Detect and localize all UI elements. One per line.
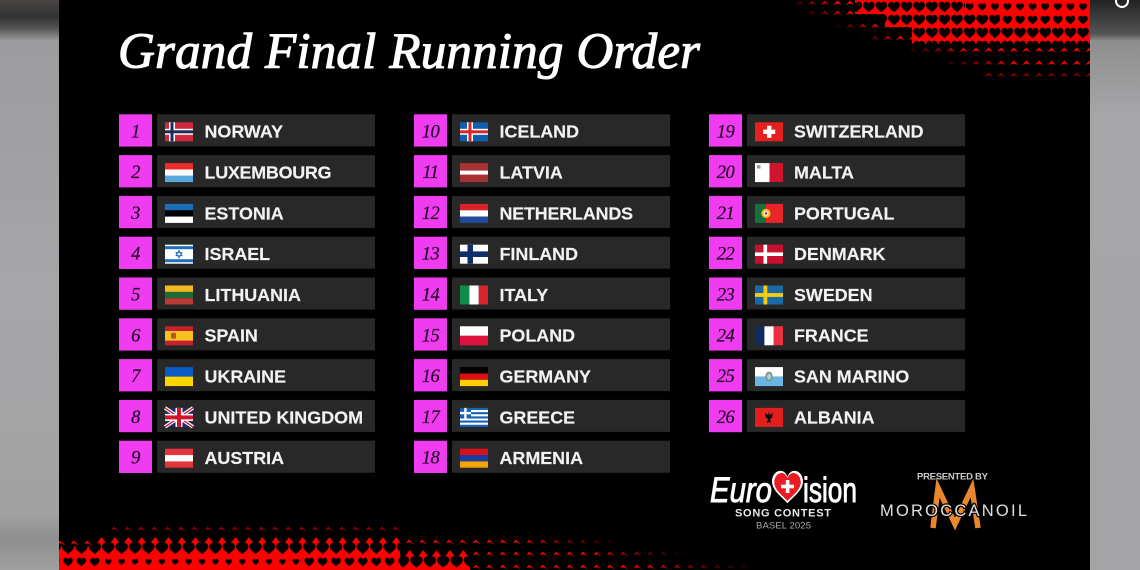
logo: Eurovision Song Contest Basel 2025: SONG CONTEST <box>735 508 831 520</box>
row: 9 Austria <box>119 441 375 473</box>
row: 18 Armenia: ARMENIA <box>500 448 583 468</box>
row: 26 Albania: 26 <box>717 408 736 428</box>
row: 25 San Marino <box>709 359 965 391</box>
icon: flag of Switzerland <box>755 122 783 141</box>
row: 16 Germany: GERMANY <box>500 367 591 387</box>
title: Grand Final Running Order <box>118 24 700 80</box>
row: 12 Netherlands: NETHERLANDS <box>500 203 633 223</box>
logo: presented by Moroccanoil: MOROCCANOIL <box>880 502 1027 520</box>
icon: flag of San Marino <box>755 367 783 386</box>
row: 17 Greece: GREECE <box>500 407 575 427</box>
row: 21 Portugal: PORTUGAL <box>794 203 894 223</box>
row: 9 Austria: 9 <box>131 449 140 469</box>
row: 13 Finland: FINLAND <box>500 244 578 264</box>
column: positions 10 to 18 <box>414 114 670 473</box>
row: 24 France: 24 <box>717 326 734 346</box>
icon: flag of Albania <box>755 408 783 427</box>
row: 17 Greece <box>414 400 670 432</box>
logo: Eurovision Song Contest Basel 2025: Euro <box>710 471 772 510</box>
row: 12 Netherlands <box>414 196 670 228</box>
row: 1 Norway <box>119 114 375 147</box>
row: 14 Italy <box>414 278 670 310</box>
row: 8 United Kingdom <box>119 400 375 432</box>
icon: flag of Latvia <box>460 163 488 182</box>
row: 3 Estonia <box>119 196 375 228</box>
icon: flag of Armenia <box>460 449 488 468</box>
pattern: red hearts bottom left <box>59 526 762 570</box>
icon: flag of Sweden <box>755 286 783 304</box>
icon: top-right player button <box>1116 0 1128 7</box>
row: 15 Poland: POLAND <box>500 326 575 346</box>
row: 5 Lithuania: 5 <box>131 286 140 306</box>
row: 5 Lithuania <box>119 278 375 310</box>
row: 25 San Marino: SAN MARINO <box>794 367 909 387</box>
row: 26 Albania <box>709 400 965 432</box>
logo: presented by Moroccanoil <box>880 472 1027 528</box>
row: 1 Norway: NORWAY <box>204 122 283 142</box>
row: 23 Sweden <box>709 278 965 310</box>
logo: Eurovision Song Contest Basel 2025: ision <box>803 471 857 510</box>
logo: Eurovision Song Contest Basel 2025 <box>710 471 857 532</box>
row: 1 Norway: 1 <box>131 122 140 142</box>
row: 2 Luxembourg: 2 <box>131 163 140 183</box>
icon: flag of Denmark <box>755 245 783 264</box>
row: 11 Latvia: 11 <box>422 163 439 183</box>
row: 25 San Marino: 25 <box>717 367 734 387</box>
row: 8 United Kingdom: UNITED KINGDOM <box>204 407 363 427</box>
row: 20 Malta <box>709 155 965 187</box>
row: 22 Denmark: DENMARK <box>794 244 886 264</box>
row: 14 Italy: ITALY <box>500 285 548 305</box>
row: 9 Austria: AUSTRIA <box>204 448 284 468</box>
icon: flag of Estonia <box>165 204 193 223</box>
row: 13 Finland: 13 <box>422 245 440 265</box>
icon: flag of Austria <box>165 449 193 468</box>
row: 2 Luxembourg: LUXEMBOURG <box>204 163 332 183</box>
row: 12 Netherlands: 12 <box>422 204 440 224</box>
row: 17 Greece: 17 <box>422 408 440 428</box>
column: positions 1 to 9 <box>119 114 375 473</box>
row: 26 Albania: ALBANIA <box>794 407 875 427</box>
pattern: red hearts top right <box>785 0 1090 78</box>
icon: flag of United Kingdom <box>165 408 193 427</box>
row: 4 Israel: 4 <box>131 245 140 265</box>
row: 22 Denmark <box>709 237 965 269</box>
row: 18 Armenia <box>414 441 670 473</box>
icon: flag of Finland <box>460 245 488 264</box>
row: 19 Switzerland: SWITZERLAND <box>794 122 924 142</box>
row: 24 France: FRANCE <box>794 326 869 346</box>
icon: flag of Germany <box>460 367 488 386</box>
icon: flag of Malta <box>755 163 783 182</box>
icon: flag of Lithuania <box>165 286 193 304</box>
row: 20 Malta: MALTA <box>794 163 854 183</box>
row: 11 Latvia: LATVIA <box>500 163 563 183</box>
row: 5 Lithuania: LITHUANIA <box>204 285 301 305</box>
row: 21 Portugal: 21 <box>717 204 734 224</box>
row: 15 Poland <box>414 318 670 351</box>
row: 21 Portugal <box>709 196 965 228</box>
row: 7 Ukraine <box>119 359 375 391</box>
row: 19 Switzerland <box>709 114 965 147</box>
row: 16 Germany <box>414 359 670 391</box>
row: 14 Italy: 14 <box>422 286 440 306</box>
logo: presented by Moroccanoil: PRESENTED BY <box>917 472 989 482</box>
icon: flag of Spain <box>165 326 193 345</box>
row: 15 Poland: 15 <box>422 326 440 346</box>
row: 13 Finland <box>414 237 670 269</box>
row: 8 United Kingdom: 8 <box>131 408 141 428</box>
icon: orange M <box>933 488 978 528</box>
row: 6 Spain <box>119 318 375 351</box>
row: 3 Estonia: ESTONIA <box>204 203 284 223</box>
row: 6 Spain: SPAIN <box>204 326 258 346</box>
row: 22 Denmark: 22 <box>717 245 734 265</box>
row: 7 Ukraine: UKRAINE <box>204 367 286 387</box>
icon: flag of Portugal <box>755 204 783 223</box>
icon: flag of Netherlands <box>460 204 488 223</box>
icon: flag of Greece <box>460 408 488 427</box>
icon: flag of Ukraine <box>165 367 193 386</box>
row: 10 Iceland <box>414 114 670 147</box>
row: 24 France <box>709 318 965 351</box>
icon: heart with Swiss cross <box>772 471 803 503</box>
row: 18 Armenia: 18 <box>422 449 440 469</box>
row: 19 Switzerland: 19 <box>717 122 734 142</box>
row: 7 Ukraine: 7 <box>131 367 141 387</box>
row: 16 Germany: 16 <box>422 367 440 387</box>
row: 23 Sweden: SWEDEN <box>794 285 873 305</box>
logo: Eurovision Song Contest Basel 2025: BASEL 2025 <box>756 520 811 532</box>
row: 4 Israel <box>119 237 375 269</box>
row: 6 Spain: 6 <box>131 326 141 346</box>
row: 3 Estonia: 3 <box>130 204 140 224</box>
icon: flag of Israel <box>165 245 193 264</box>
row: 23 Sweden: 23 <box>717 286 734 306</box>
row: 10 Iceland: 10 <box>422 122 440 142</box>
row: 11 Latvia <box>414 155 670 187</box>
row: 4 Israel: ISRAEL <box>204 244 270 264</box>
row: 20 Malta: 20 <box>717 163 736 183</box>
row: 10 Iceland: ICELAND <box>500 122 579 142</box>
icon: flag of Poland <box>460 326 488 345</box>
icon: flag of Iceland <box>460 122 488 141</box>
icon: flag of Norway <box>165 122 193 141</box>
icon: flag of Luxembourg <box>165 163 193 182</box>
icon: flag of France <box>755 326 783 345</box>
icon: flag of Italy <box>460 286 488 304</box>
column: positions 19 to 26 <box>709 114 965 432</box>
row: 2 Luxembourg <box>119 155 375 187</box>
